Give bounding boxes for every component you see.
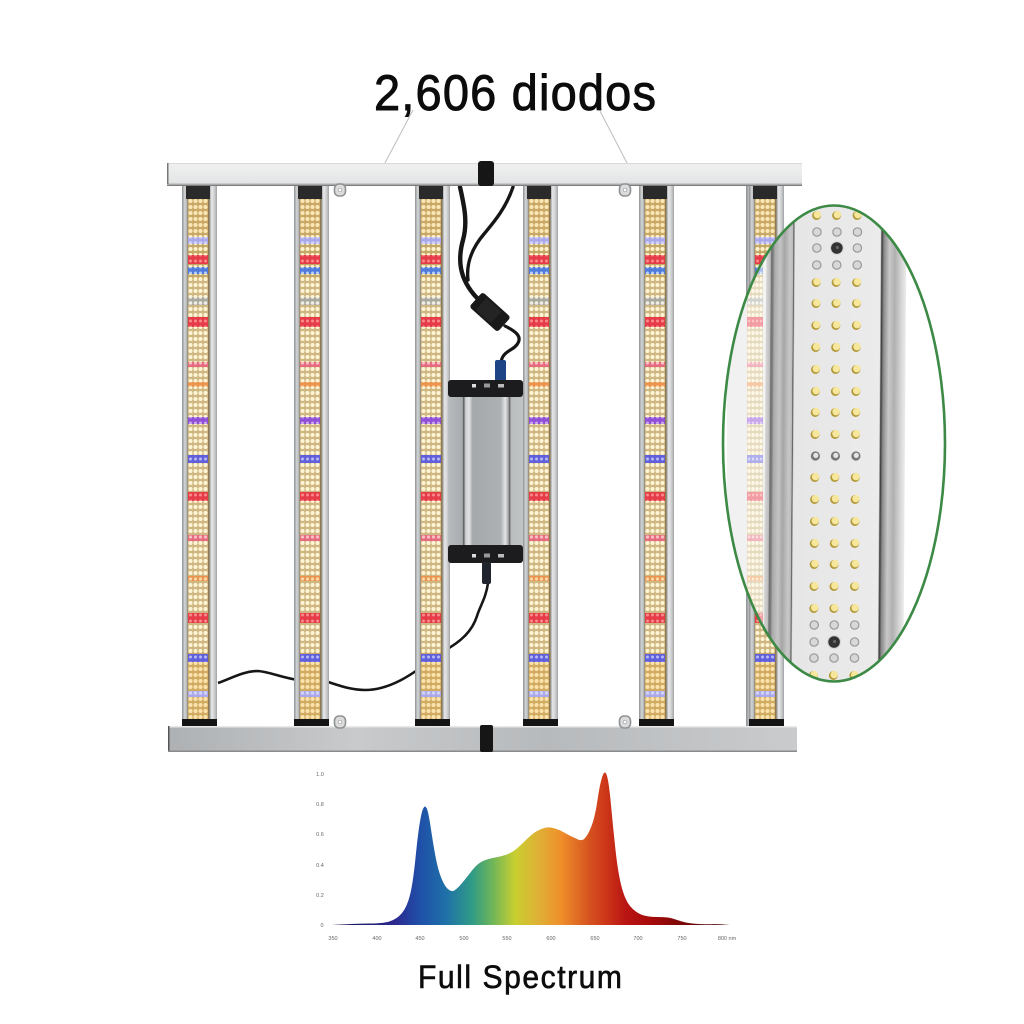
caption: Full Spectrum: Full Spectrum [418, 959, 622, 995]
LED driver box [448, 380, 523, 563]
LED bar 4 [523, 185, 558, 730]
ghost bar seen through lens [727, 258, 766, 624]
y axis labels: 0 [320, 923, 324, 929]
x axis labels: 750 [677, 936, 687, 942]
leader lines from title to top bar [385, 110, 627, 163]
top mounting bar [167, 163, 802, 186]
x axis labels: 400 [372, 936, 382, 942]
LED bar 6 [746, 185, 784, 730]
spectrum chart [316, 772, 737, 942]
cable splitter connector [469, 292, 511, 332]
x axis labels: 650 [590, 936, 600, 942]
y axis labels: 1.0 [316, 772, 324, 778]
driver bottom cap [448, 545, 523, 563]
hanging eyelets [334, 184, 630, 728]
x axis labels: 500 [459, 936, 469, 942]
LED bar 2 [294, 185, 329, 730]
magnified LEDs [809, 211, 862, 680]
power cables: lower wire to bars [218, 583, 488, 690]
bottom center clip [480, 725, 493, 752]
spectrum curve [332, 772, 730, 925]
x axis labels: 450 [415, 936, 425, 942]
y axis labels: 0.8 [316, 802, 324, 808]
x axis labels: 800 nm [718, 936, 737, 942]
top center clip [478, 161, 494, 186]
title: 2,606 diodos: 2,606 diodos [374, 66, 656, 121]
y axis labels: 0.4 [316, 863, 324, 869]
power cables: upper splitter wires [460, 187, 519, 362]
driver output plug [482, 562, 491, 584]
bottom mounting bar [168, 726, 797, 752]
x axis labels: 550 [502, 936, 512, 942]
LED bar 5 [639, 185, 674, 730]
magnified detail ellipse [723, 199, 945, 719]
x axis labels: 350 [328, 936, 338, 942]
y axis labels: 0.2 [316, 893, 324, 899]
x axis labels: 700 [633, 936, 643, 942]
y axis labels: 0.6 [316, 832, 324, 838]
blue driver plug [495, 360, 506, 381]
magnified rail and LED board [763, 200, 907, 690]
y axis labels [316, 772, 324, 929]
x axis labels [328, 936, 737, 942]
LED bar 3 [415, 185, 450, 730]
LED bar 1 [182, 185, 217, 730]
driver top cap [448, 380, 523, 397]
x axis labels: 600 [546, 936, 556, 942]
